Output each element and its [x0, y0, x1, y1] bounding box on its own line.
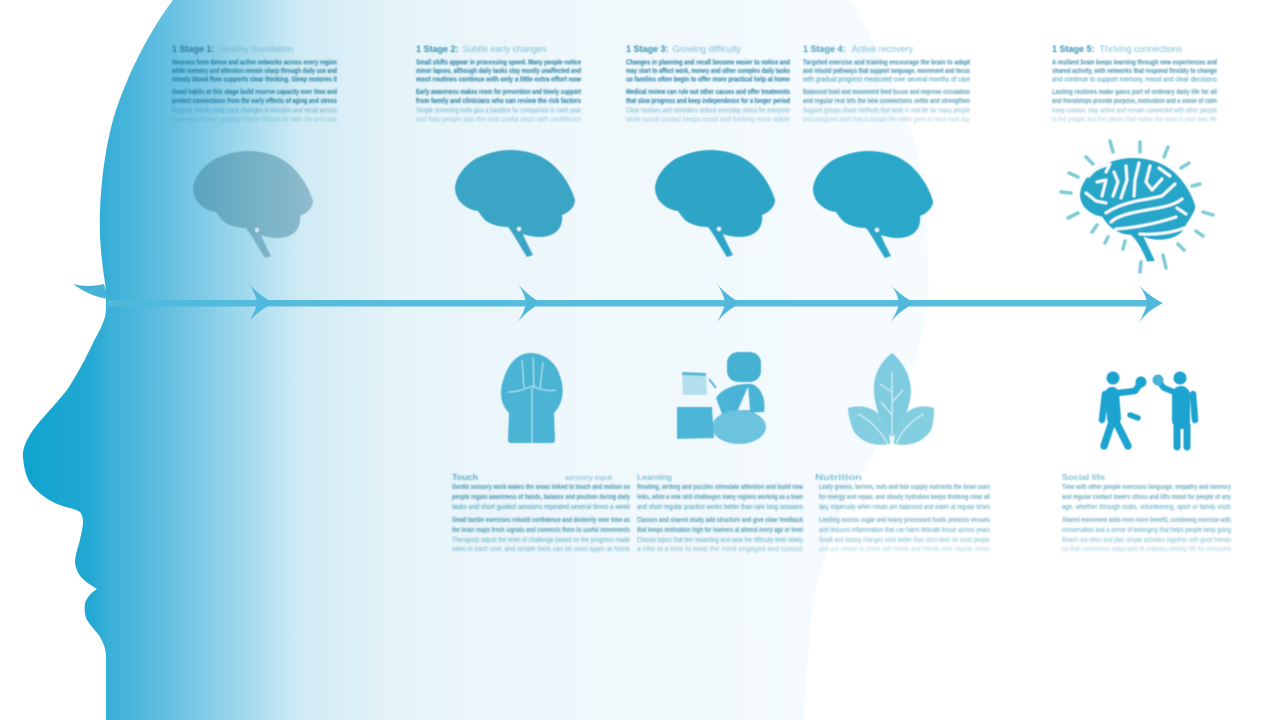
arrowhead 2: [517, 283, 541, 322]
arrowhead 1: [248, 283, 273, 322]
heading: stage 3: 1 Stage 3: Growing difficulty: [626, 44, 741, 54]
text block: stage 1: steady blood flow supports clear thinking. Sleep restores it: [172, 76, 338, 84]
text block: stage 2: Early awareness makes room for prevention and timely support: [416, 89, 582, 96]
text block: stage 3: so families often begin to offer more practical help at home: [626, 76, 790, 84]
text block: nutrition: for energy and repair, and steady hydration keeps thinking clear all: [819, 494, 990, 501]
brain folds: [1086, 163, 1186, 234]
brain 4: [813, 151, 933, 258]
heading: stage 1: 1 Stage 1: Healthy foundation: [172, 44, 294, 54]
text block: nutrition: Limiting excess sugar and heavy processed foods protects vessels: [819, 517, 990, 524]
text block: learning: and short regular practice works better than rare long sessions: [637, 504, 803, 511]
text block: social: Reach out often and plan simple activities together with good friends: [1062, 537, 1231, 544]
text block: stage 3: Medical review can rule out other causes and offer treatments: [626, 89, 790, 96]
text block: social: [1062, 473, 1231, 553]
brain outline: [1080, 158, 1195, 262]
text block: stage 1: Neurons form dense and active networks across every region: [172, 60, 337, 66]
text block: stage 4: and rebuild pathways that support language, movement and focus: [803, 68, 970, 75]
text block: touch: sensory input: [565, 475, 612, 482]
icon: glowing detailed brain: [1061, 141, 1213, 272]
text block: nutrition: and reduces inflammation that can harm delicate tissue across years: [819, 527, 990, 534]
text block: stage 2: and help people plan the next useful steps with confidence: [416, 116, 581, 124]
text block: stage 5: Keep curious, stay active and remain connected with other people: [1052, 108, 1217, 114]
text block: touch: the brain maps fresh signals and connects them to useful movements: [452, 527, 630, 534]
text block: stage 1: [171, 44, 338, 124]
icon: two people high five: [1102, 372, 1195, 447]
heading: stage 4: 1 Stage 4: Active recovery: [803, 44, 914, 54]
arrowhead 3: [716, 283, 741, 322]
text block: stage 4: and regular rest lets the new connections settle and strengthen: [803, 98, 970, 105]
text block: stage 3: [625, 44, 790, 124]
text block: stage 5: Lasting routines make gains part of ordinary daily life for all: [1052, 89, 1217, 96]
text block: stage 5: A resilient brain keeps learning through new experiences and: [1052, 60, 1217, 66]
text block: learning: Choose topics that feel rewarding and raise the difficulty level slowly: [637, 537, 803, 544]
text block: nutrition: Leafy greens, berries, nuts and fish supply nutrients the brain uses: [819, 484, 990, 491]
text block: learning: Classes and shared study add structure and give clear feedback: [637, 517, 803, 524]
text block: stage 5: [1052, 44, 1217, 124]
text block: stage 4: Support groups share methods that work in real life for many people: [803, 108, 970, 114]
text block: learning: a little at a time to keep the mind engaged and curious: [637, 546, 803, 553]
text block: stage 4: and caregivers learn how to sustain the useful gains at home each day: [803, 116, 970, 124]
text block: stage 5: and continue to support memory, mood and clear decisions: [1052, 76, 1217, 84]
text block: touch: Gentle sensory work wakes the areas linked to touch and motion so: [452, 484, 630, 491]
heading: nutrition: Nutrition: [815, 473, 862, 482]
text block: stage 1: Regular checks help track changes in function and recall across: [172, 108, 337, 114]
text block: social: age, whether through clubs, volunteering, sport or family visits: [1062, 504, 1231, 511]
brain rays: [1061, 141, 1213, 272]
text block: stage 3: Changes in planning and recall become easier to notice and: [626, 60, 790, 66]
text block: nutrition: day, especially when meals are balanced and eaten at regular times: [819, 504, 990, 511]
dome veins: [508, 357, 556, 443]
text block: nutrition: Small and lasting changes work better than strict diets for most people: [819, 537, 990, 544]
text block: stage 3: may start to affect work, money and other complex daily tasks: [626, 68, 790, 75]
text block: learning: Reading, writing and puzzles stimulate attention and build new: [637, 484, 803, 491]
text block: touch: people regain awareness of hands, balance and position during daily: [452, 494, 630, 501]
arrowhead 4: [889, 283, 915, 322]
text block: stage 3: while social contact keeps mood and thinking more stable: [625, 116, 790, 124]
timeline arrow: [73, 283, 1163, 323]
text block: social: and regular contact lowers stress and lifts mood for people of any: [1062, 494, 1231, 501]
heading: learning: Learning: [637, 473, 672, 482]
heading: stage 2: 1 Stage 2: Subtle early changes: [416, 44, 547, 54]
text block: nutrition: [815, 473, 990, 553]
text block: social: so that connection stays part of ordinary weekly life for everyone: [1062, 546, 1231, 553]
icon: hand and brain dome: [501, 353, 563, 443]
text block: stage 4: Targeted exercise and training encourage the brain to adapt: [803, 60, 971, 66]
text block: stage 2: from family and clinicians who can review the risk factors: [416, 98, 581, 105]
text block: touch: [452, 473, 630, 553]
text block: learning: [637, 473, 803, 553]
text block: stage 3: that slow progress and keep independence for a longer period: [626, 98, 790, 105]
text block: touch: tasks and short guided sessions repeated several times a week: [452, 504, 630, 511]
text block: stage 2: [416, 44, 582, 124]
text block: social: conversation and a sense of belonging that helps people keep going: [1062, 527, 1231, 534]
text block: nutrition: and are simple to share with family and friends over regular meals: [819, 546, 990, 553]
text block: stage 5: shared activity, with networks that respond flexibly to change: [1052, 68, 1217, 75]
text block: learning: that keeps motivation high for learners at almost every age or level: [637, 527, 803, 534]
icon: leaves: [848, 353, 934, 445]
text block: stage 1: Good habits at this stage build reserve capacity over time and: [172, 89, 337, 96]
text block: touch: Small tactile exercises rebuild confidence and dexterity over time as: [452, 517, 630, 524]
text block: stage 1: protect connections from the early effects of aging and stress: [172, 98, 337, 105]
head silhouette: [23, 0, 928, 720]
brain 2: [455, 150, 575, 257]
heading: social: Social life: [1062, 473, 1106, 482]
text block: stage 1: from year to year, guiding simple choices for later life and care: [172, 116, 337, 124]
final arrowhead: [1138, 284, 1163, 323]
text block: touch: seen in each visit, and simple tools can be used again at home: [452, 546, 630, 553]
text block: stage 1: while memory and attention remain sharp through daily use and: [171, 68, 337, 75]
text block: learning: links, while a new skill challenges many regions working as a team: [637, 494, 803, 501]
text block: stage 4: with gradual progress measured over several months of care: [802, 76, 970, 84]
text block: social: Time with other people exercises language, empathy and memory: [1062, 484, 1231, 491]
heading: touch: Touch: [452, 473, 478, 482]
text block: stage 2: minor lapses, although daily tasks stay mostly unaffected and: [416, 68, 581, 75]
text block: stage 5: and friendships provide purpose, motivation and a sense of calm: [1052, 98, 1217, 105]
text block: stage 5: to the people and the places that matter the most in your own life: [1052, 116, 1217, 124]
icon: person at desk: [677, 352, 766, 444]
heading: stage 5: 1 Stage 5: Thriving connections: [1052, 44, 1183, 54]
brain 1: [193, 151, 313, 258]
brain 3: [655, 150, 775, 257]
text block: stage 2: Simple screening tools give a baseline for comparison in each year: [416, 108, 582, 114]
text block: stage 4: [802, 44, 971, 124]
text block: stage 2: most routines continue with only a little extra effort now: [416, 76, 581, 84]
text block: stage 2: Small shifts appear in processing speed. Many people notice: [416, 60, 581, 66]
text block: touch: Therapists adjust the level of challenge based on the progress made: [452, 537, 630, 544]
text block: stage 3: Clear routines and reminders reduce everyday stress for everyone: [626, 108, 790, 114]
leaf veins: [858, 372, 924, 444]
text block: stage 4: Balanced food and movement feed tissue and improve circulation: [803, 89, 970, 96]
